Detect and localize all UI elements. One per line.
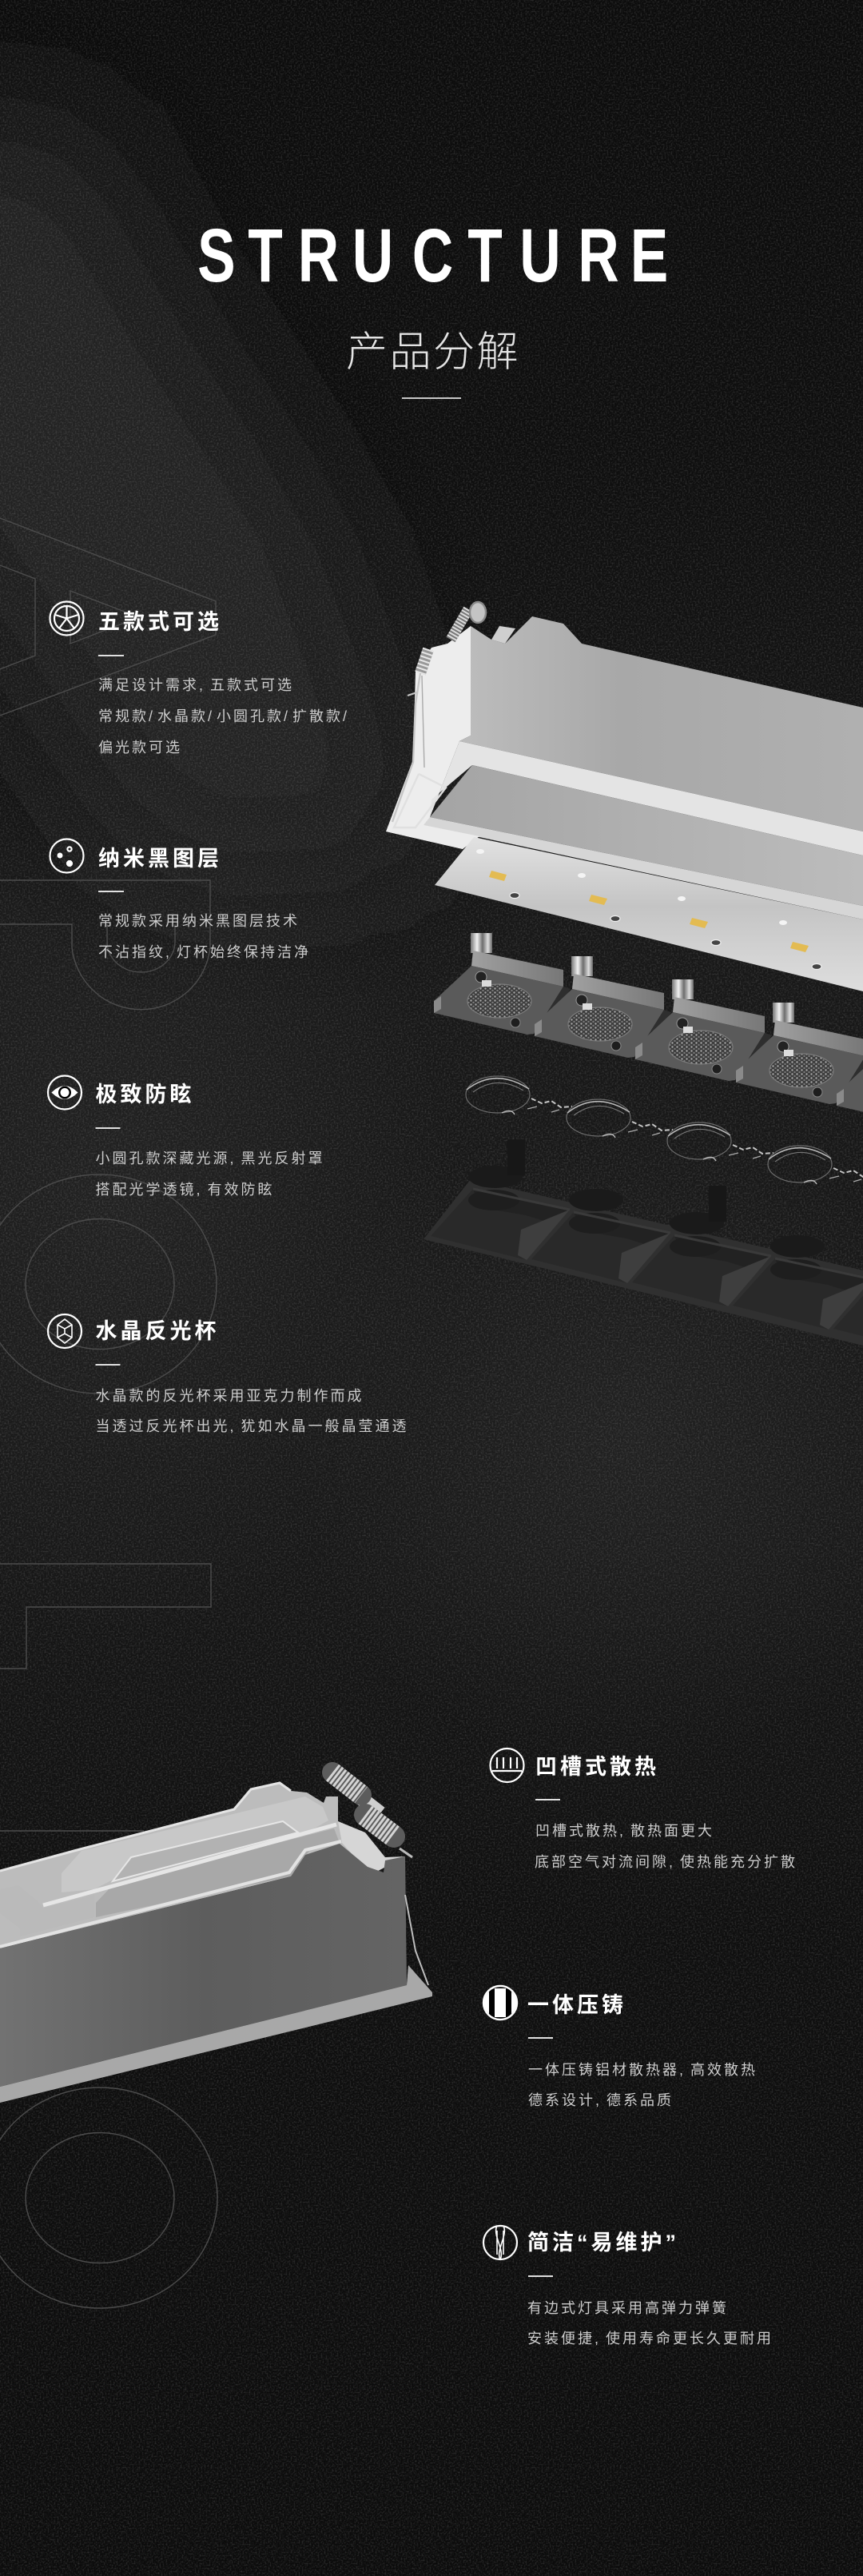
decorative outline letters: [0, 518, 217, 2308]
feature: 水晶反光杯: 水晶款的反光杯采用亚克力制作而成: [96, 1388, 364, 1404]
icon: eye: [48, 1076, 82, 1110]
feature: 水晶反光杯: 当透过反光杯出光,犹如水晶一般晶莹通透: [96, 1418, 409, 1434]
icon: die-cast bars: [483, 1986, 517, 2020]
feature: 纳米黑图层: 不沾指纹,灯杯始终保持洁净: [98, 944, 311, 960]
feature: 简洁“易维护”: 安装便捷,使用寿命更长久更耐用: [527, 2331, 774, 2347]
feature: 纳米黑图层: [50, 839, 311, 960]
feature: 五款式可选: 偏光款可选: [98, 740, 182, 756]
feature: 水晶反光杯: 水晶反光杯: [96, 1319, 219, 1343]
feature: 凹槽式散热: 凹槽式散热: [535, 1755, 659, 1779]
feature: 极致防眩: 小圆孔款深藏光源,黑光反射罩: [96, 1150, 325, 1166]
feature: 纳米黑图层: 常规款采用纳米黑图层技术: [98, 913, 300, 929]
feature: 简洁“易维护”: [483, 2226, 774, 2347]
black reflector: [424, 1139, 863, 1353]
icon: three dots: [50, 839, 83, 873]
lens module row: [434, 933, 863, 1128]
transparent ring row: [466, 1076, 863, 1184]
feature: 凹槽式散热: [491, 1749, 797, 1870]
icon: spring link: [483, 2226, 517, 2259]
feature: 水晶反光杯: [48, 1314, 409, 1434]
LED circuit board: [435, 837, 863, 991]
feature: 纳米黑图层: 纳米黑图层: [98, 847, 222, 871]
icon: crystal: [48, 1314, 82, 1348]
icon: grooves: [491, 1749, 524, 1782]
feature: 一体压铸: 一体压铸: [527, 1993, 626, 2017]
feature: 简洁“易维护”: 简洁“易维护”: [527, 2231, 679, 2255]
icon: five spoke wheel: [50, 601, 83, 635]
feature: 极致防眩: 极致防眩: [96, 1083, 195, 1107]
feature: 一体压铸: 德系设计,德系品质: [528, 2092, 674, 2108]
spring clip wire: [392, 602, 486, 827]
feature: 五款式可选: 常规款/水晶款/小圆孔款/扩散款/: [98, 708, 352, 724]
feature: 五款式可选: 五款式可选: [98, 610, 222, 634]
assembled lamp: rear view: [0, 1772, 432, 2103]
feature: 简洁“易维护”: 有边式灯具采用高弹力弹簧: [527, 2300, 729, 2316]
feature: 五款式可选: [50, 601, 352, 756]
feature: 一体压铸: [483, 1986, 758, 2108]
exploded lamp: heat-sink housing: [386, 602, 863, 919]
feature: 五款式可选: 满足设计需求,五款式可选: [98, 677, 294, 693]
subtitle: 产品分解: [346, 329, 520, 376]
title divider: [402, 397, 461, 399]
feature: 一体压铸: 一体压铸铝材散热器,高效散热: [528, 2062, 758, 2078]
springs: [332, 1772, 428, 1985]
feature: 极致防眩: 搭配光学透镜,有效防眩: [96, 1182, 275, 1198]
feature: 凹槽式散热: 凹槽式散热,散热面更大: [535, 1823, 714, 1839]
feature: 凹槽式散热: 底部空气对流间隙,使热能充分扩散: [535, 1854, 797, 1870]
feature: 极致防眩: [48, 1076, 325, 1198]
title: STRUCTURE: [197, 213, 668, 297]
